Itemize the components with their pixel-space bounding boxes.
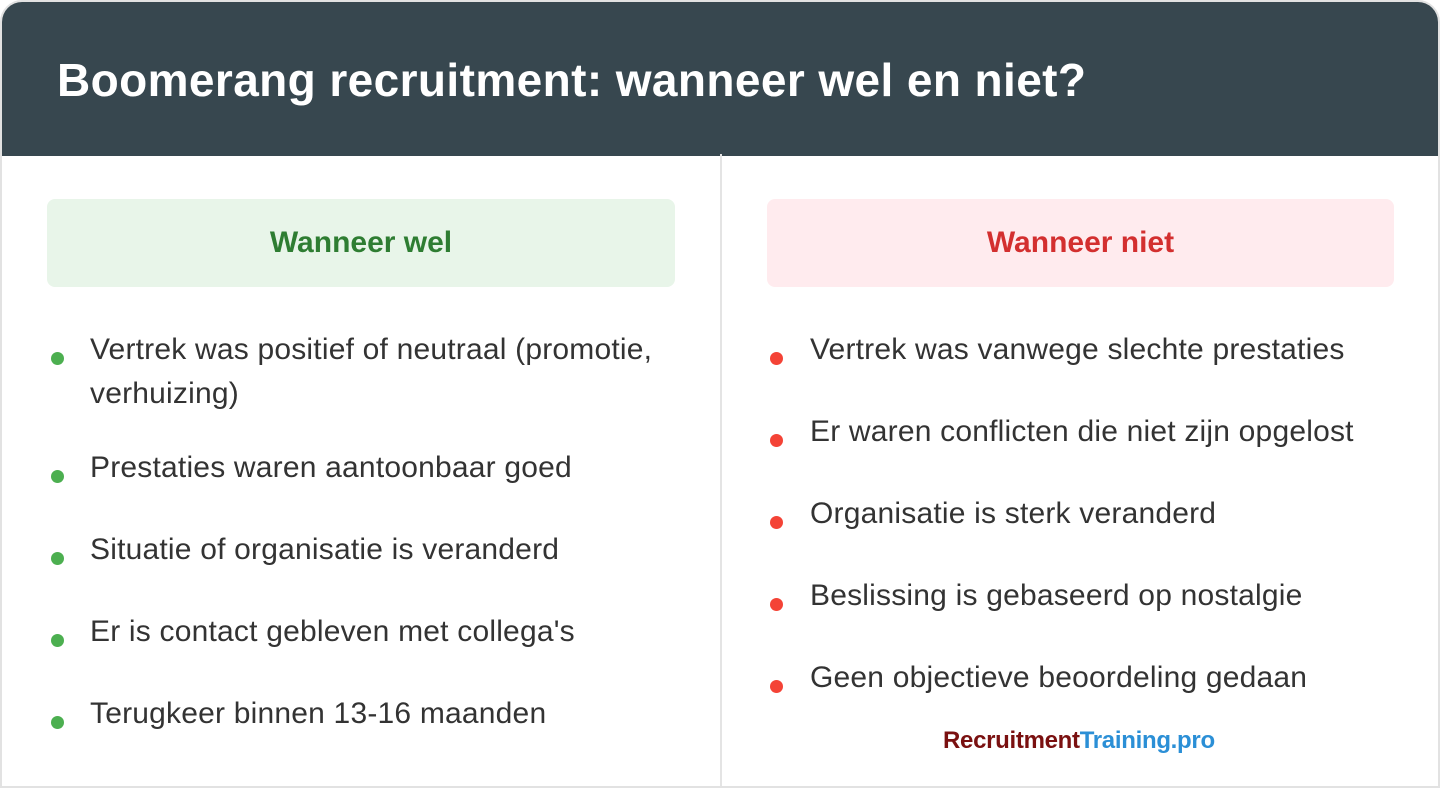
logo: RecruitmentTraining.pro [943,727,1215,754]
header [0,0,1440,156]
panel: wanneer niet [767,199,1394,754]
heading: wanneer niet: Wanneer niet [987,226,1174,259]
item 2: Prestaties waren aantoonbaar goed [90,451,572,484]
heading: wanneer wel [47,199,675,287]
item 5: Geen objectieve beoordeling gedaan [810,661,1307,694]
panel: wanneer wel [47,199,675,730]
item 1: Vertrek was vanwege slechte prestaties [810,333,1345,366]
item 2: Er waren conflicten die niet zijn opgelost [810,415,1354,448]
item 3: Situatie of organisatie is veranderd [90,533,559,566]
item 4: Er is contact gebleven met collega's [90,615,575,648]
item 5: Terugkeer binnen 13-16 maanden [90,697,546,730]
heading: wanneer niet [767,199,1394,287]
header: Boomerang recruitment: wanneer wel en niet? [57,54,1086,106]
item 1: Vertrek was positief of neutraal (promotie, verhuizing) [90,333,652,410]
item 4: Beslissing is gebaseerd op nostalgie [810,579,1303,612]
heading: wanneer wel: Wanneer wel [270,226,452,259]
item 3: Organisatie is sterk veranderd [810,497,1216,530]
